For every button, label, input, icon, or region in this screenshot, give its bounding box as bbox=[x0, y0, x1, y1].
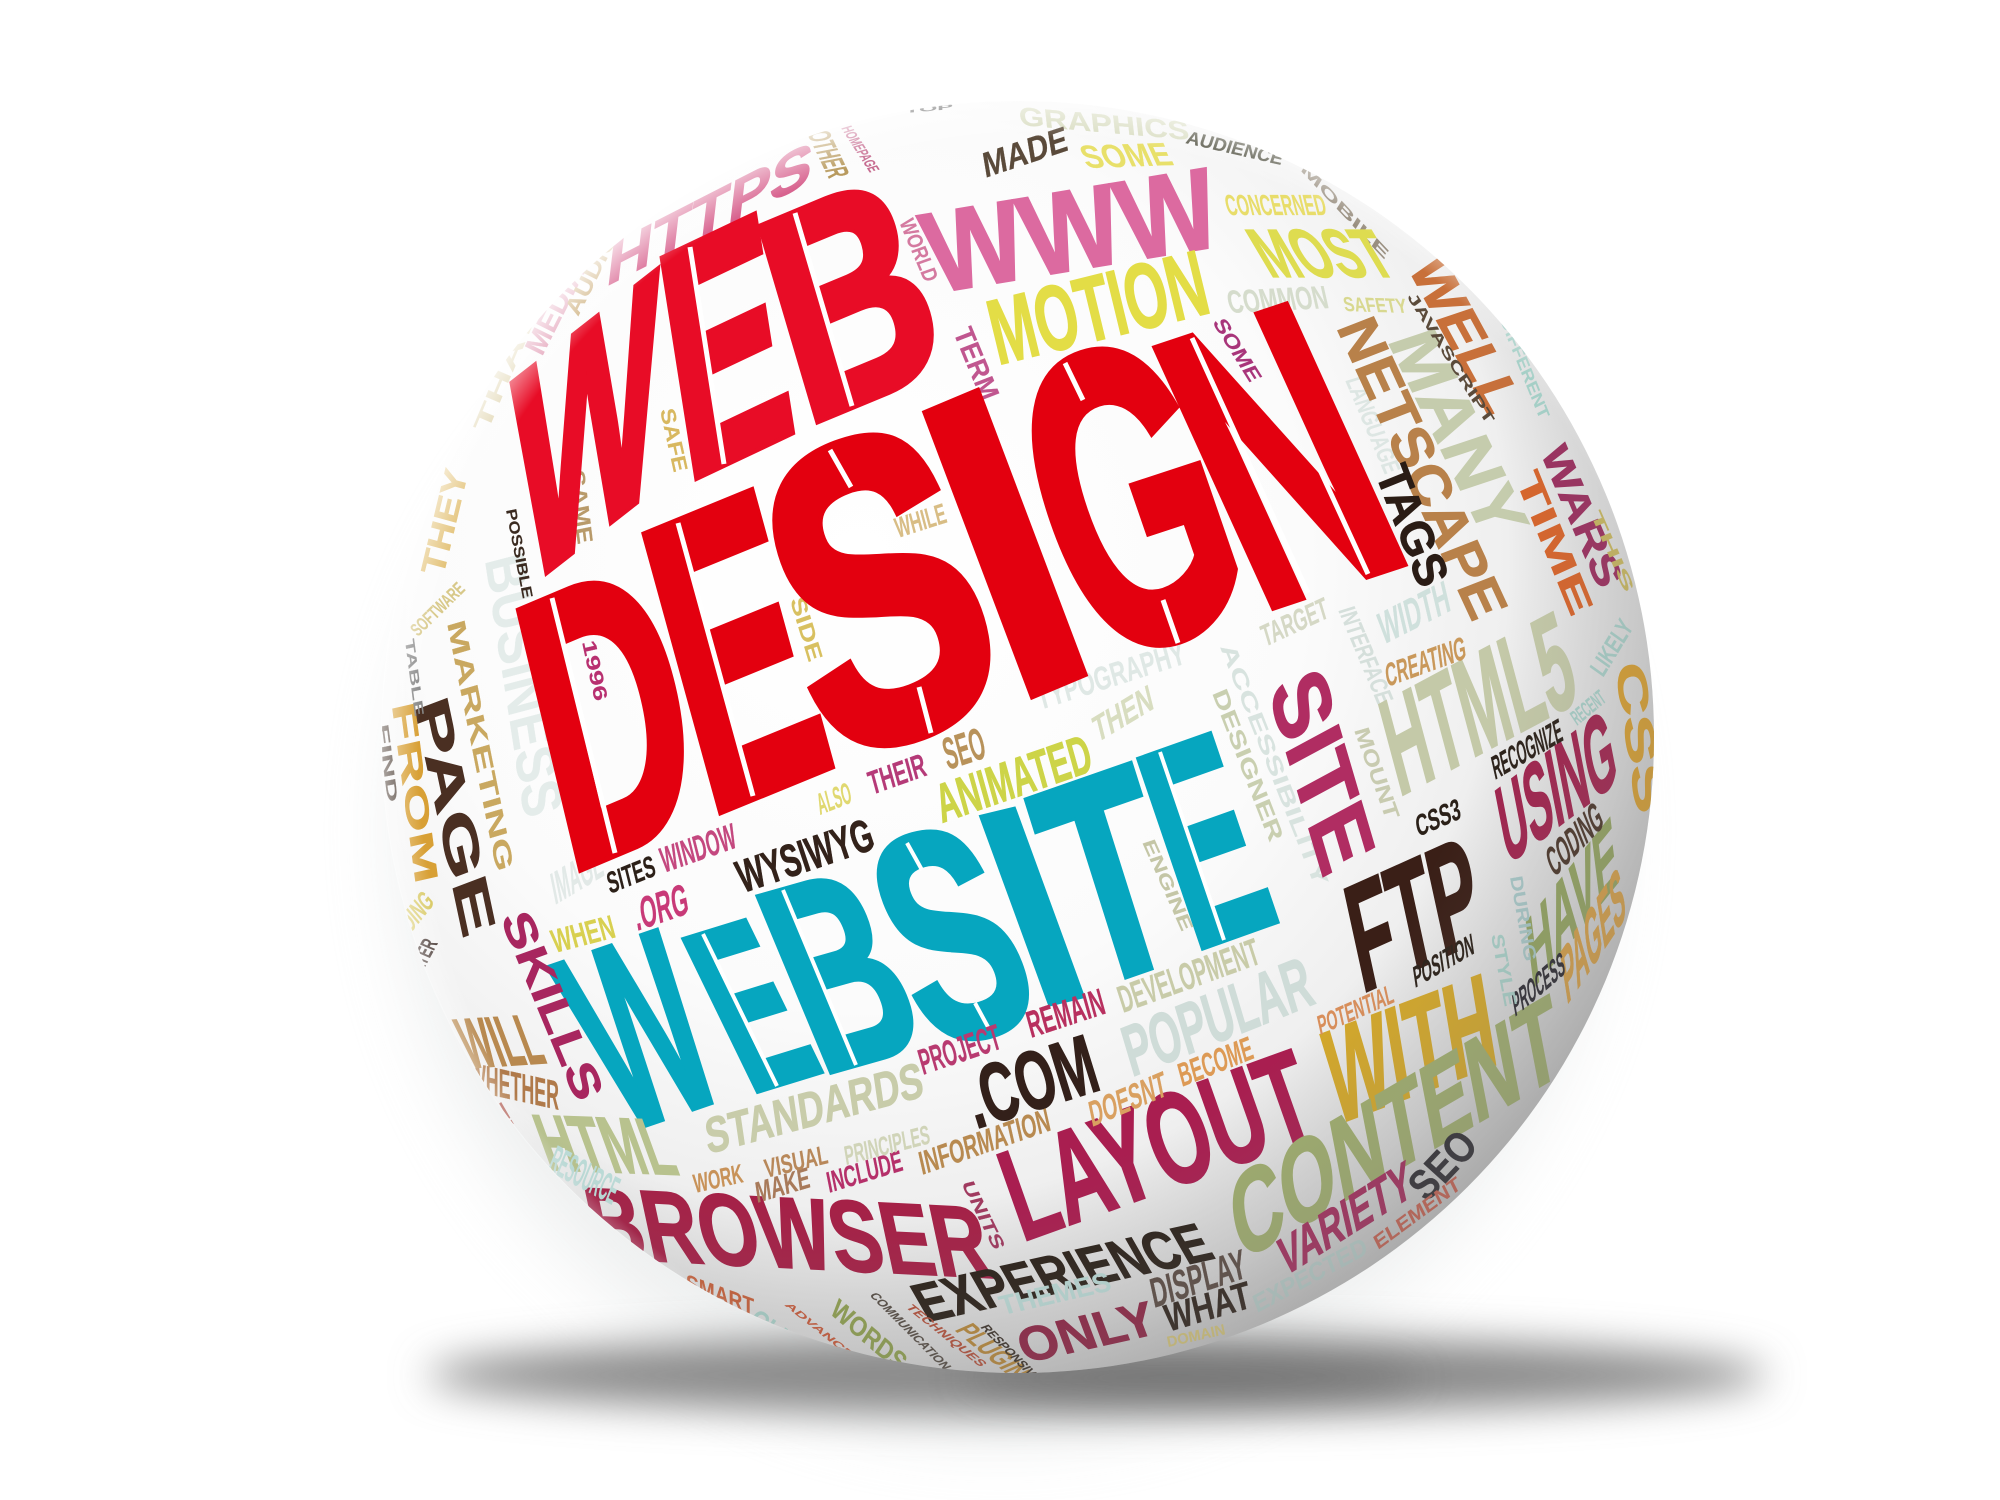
ground shadow bbox=[427, 1335, 1767, 1415]
word: MOST: MOST bbox=[1233, 215, 1409, 292]
upper-left small words: OTHER bbox=[800, 128, 857, 180]
right lower small words: DURING bbox=[1506, 874, 1541, 963]
right lower small words: RECENT bbox=[1566, 685, 1609, 730]
top small words: CONCERNED bbox=[1221, 189, 1330, 221]
left side words: MARKETING bbox=[442, 616, 519, 875]
right lower small words: CSS bbox=[1606, 658, 1674, 817]
pale background words: BUSINESS bbox=[473, 547, 575, 823]
right lower small words: RECOGNIZE bbox=[1488, 711, 1566, 787]
pale background words: MOBILE bbox=[1298, 159, 1392, 262]
middle small words: ANIMATED bbox=[929, 722, 1098, 834]
pale background words: THEN bbox=[1089, 676, 1157, 750]
middle small words: .ORG bbox=[630, 873, 692, 940]
word cloud on sphere bbox=[375, 101, 1674, 1383]
middle small words bbox=[547, 717, 1198, 1082]
middle small words: WYSIWYG bbox=[730, 808, 880, 902]
word: HTML5: HTML5 bbox=[1367, 581, 1588, 825]
pale background words: INTERFACE bbox=[1333, 603, 1399, 707]
word: WEBSITE bbox=[546, 730, 1280, 1128]
right lower small words: CREATING bbox=[1383, 629, 1468, 694]
top small words: MADE bbox=[980, 118, 1070, 185]
lower small words: CLIENT bbox=[745, 1303, 831, 1378]
lower small words: WHAT bbox=[1160, 1273, 1255, 1340]
left side words: DOING bbox=[387, 885, 439, 947]
word: USING: USING bbox=[1489, 685, 1624, 887]
lower small words: ADVANCED bbox=[782, 1301, 867, 1366]
right upper words: JAVASCRIPT bbox=[1405, 289, 1498, 427]
right lower small words: PROCESS bbox=[1510, 944, 1567, 1024]
middle small words: WHEN bbox=[547, 908, 619, 960]
lower small words: WORK bbox=[691, 1158, 745, 1199]
lower small words: WORDS bbox=[826, 1293, 912, 1378]
middle small words: SEO bbox=[937, 717, 990, 779]
word: WEB: E bbox=[640, 142, 810, 549]
upper-left small words: MEDIA bbox=[518, 258, 592, 360]
lower small words: UNITS bbox=[957, 1179, 1010, 1251]
word: WEBSITE: T bbox=[1005, 702, 1212, 1050]
right upper words: MANY bbox=[1373, 320, 1544, 545]
left side words: FROM bbox=[385, 698, 445, 887]
lower small words: ELEMENT bbox=[1370, 1172, 1464, 1254]
pale background words: TARGET bbox=[1257, 591, 1332, 653]
word: ONLY: ONLY bbox=[1009, 1291, 1164, 1373]
sphere shading overlay bbox=[381, 100, 1655, 1374]
right upper words: WELL bbox=[1396, 251, 1537, 421]
word: DESIGN: N bbox=[1105, 220, 1454, 689]
middle small words: SITES bbox=[603, 849, 659, 900]
lower small words: BECOME bbox=[1174, 1029, 1257, 1094]
left side words: WHETHER bbox=[469, 1053, 559, 1119]
word: WITH: WITH bbox=[1315, 944, 1505, 1153]
lower small words: TEXT bbox=[1546, 1024, 1616, 1114]
sphere body bbox=[382, 101, 1654, 1373]
lower small words: THEMES bbox=[995, 1266, 1115, 1321]
middle small words: PROJECT bbox=[914, 1016, 1005, 1082]
top small words bbox=[980, 118, 1409, 317]
pale background words: LANGUAGE bbox=[1340, 373, 1406, 477]
word: FTP: FTP bbox=[1333, 804, 1494, 1024]
right upper words: NETSCAPE bbox=[1325, 309, 1521, 627]
word: DESIGN: I bbox=[872, 296, 1137, 788]
right lower small words: LIKELY bbox=[1585, 614, 1638, 681]
upper-left small words: SAME bbox=[564, 468, 598, 546]
left side words: SKILLS bbox=[491, 905, 614, 1106]
upper-left small words: HTTPS bbox=[603, 127, 817, 300]
left side words: LATER bbox=[400, 935, 442, 982]
upper-left small words: THEY bbox=[414, 465, 475, 579]
word: STANDARDS: STANDARDS bbox=[701, 1051, 927, 1165]
top small words: SOME bbox=[1074, 136, 1178, 175]
middle small words: WINDOW bbox=[656, 815, 740, 880]
pale background words: DESIGNER bbox=[1208, 685, 1288, 845]
right upper words: WARS bbox=[1532, 439, 1632, 593]
right upper words: TAGS bbox=[1366, 457, 1460, 594]
middle small words: REMAIN bbox=[1022, 980, 1109, 1046]
lower small words: DOMAIN bbox=[1165, 1321, 1227, 1350]
pale background words: IMAGE bbox=[547, 835, 607, 914]
upper-left small words: SOME bbox=[1208, 315, 1267, 385]
upper-left small words: AUDIO bbox=[560, 228, 622, 319]
word: WEB: W bbox=[510, 203, 667, 658]
upper-left small words: HOMEPAGE bbox=[838, 124, 883, 174]
word: DESIGN bbox=[516, 300, 1408, 874]
word: DESIGN: S bbox=[715, 325, 1042, 853]
word: WEBSITE: S bbox=[830, 760, 1072, 1109]
lower small words: MAKE bbox=[753, 1161, 812, 1209]
upper-left small words: WORLD bbox=[895, 215, 943, 285]
word: EXPERIENCE: EXPERIENCE bbox=[901, 1212, 1223, 1333]
upper-left small words bbox=[414, 124, 1267, 703]
word: SITE: SITE bbox=[1252, 653, 1393, 889]
word: WEBSITE: W bbox=[523, 877, 756, 1184]
word: DESIGN: G bbox=[967, 244, 1292, 748]
word: WEB: B bbox=[729, 109, 971, 486]
lower small words: SEO bbox=[1398, 1121, 1487, 1209]
right upper words: TIME bbox=[1508, 465, 1601, 621]
left side words: WILL bbox=[446, 1000, 554, 1083]
lower small words: DISPLAY bbox=[1146, 1240, 1250, 1317]
upper-left small words: POSSIBLE bbox=[503, 507, 536, 600]
word: HAVE: HAVE bbox=[1521, 794, 1622, 1010]
left side words: TABLE bbox=[402, 637, 427, 718]
right lower small words: STYLE bbox=[1487, 932, 1521, 1008]
lower small words: SMART bbox=[686, 1269, 754, 1320]
word: DEVELOPMENT: DEVELOPMENT bbox=[1112, 930, 1264, 1021]
lower small words: TECHNIQUES bbox=[903, 1303, 991, 1368]
lower small words: EXPECTED bbox=[1249, 1232, 1371, 1318]
lower small words: THIS bbox=[485, 1099, 540, 1172]
upper-left small words: SIDE bbox=[786, 593, 827, 665]
word: POPULAR: POPULAR bbox=[1114, 941, 1321, 1092]
left side words: PAGE bbox=[404, 689, 506, 944]
right lower small words: POSITION bbox=[1411, 927, 1476, 994]
lower small words: INCLUDE bbox=[824, 1144, 905, 1199]
right upper words: THIS bbox=[1587, 508, 1638, 594]
lower small words: VARIETY bbox=[1273, 1149, 1416, 1288]
upper-left small words: TERM bbox=[947, 323, 1006, 404]
lower small words: RESPONSIVE bbox=[978, 1323, 1046, 1383]
lower small words: PLUGIN bbox=[948, 1319, 1038, 1382]
pale background words: TYPOGRAPHY bbox=[1032, 634, 1189, 717]
word: LAYOUT: LAYOUT bbox=[982, 1022, 1331, 1268]
word: CONTENT: CONTENT bbox=[1220, 969, 1570, 1286]
left side words: FIND bbox=[375, 722, 401, 804]
middle small words: ALSO bbox=[813, 776, 855, 821]
right lower small words: POTENTIAL bbox=[1315, 978, 1396, 1041]
pale background words: ACCESSIBILITY bbox=[1216, 640, 1333, 889]
pale background words: WIDTH bbox=[1374, 570, 1454, 654]
word: WEBSITE: E bbox=[651, 869, 850, 1141]
word: WEBSITE: I bbox=[945, 746, 1118, 1065]
upper-left small words: WHILE bbox=[891, 497, 950, 544]
word: DESIGN: D bbox=[486, 475, 731, 952]
lower small words: RESOURCE bbox=[544, 1137, 625, 1213]
word: WEB bbox=[509, 190, 934, 577]
right lower small words: PAGES bbox=[1556, 849, 1629, 1020]
pale background words: MOUNT bbox=[1350, 725, 1404, 821]
upper-left small words: THAT bbox=[469, 309, 540, 435]
pale background words: GRAPHICS bbox=[1017, 101, 1191, 146]
word: MOTION: MOTION bbox=[978, 230, 1218, 384]
lower small words: DOESNT bbox=[1085, 1063, 1170, 1134]
pale background words: SEARCH bbox=[1248, 117, 1377, 198]
soft halo behind sphere bbox=[400, 230, 1600, 1430]
word: WEBSITE: E bbox=[1109, 671, 1303, 1009]
middle small words: ENGINE bbox=[1138, 837, 1198, 933]
word: .COM: .COM bbox=[954, 1016, 1108, 1146]
right upper words bbox=[1325, 251, 1638, 627]
upper-left small words: 1996 bbox=[578, 638, 612, 703]
left side words: SOFTWARE bbox=[406, 578, 469, 640]
lower small words: VISUAL bbox=[762, 1139, 830, 1184]
right lower small words bbox=[1315, 614, 1674, 1041]
upper-left small words: SAFE bbox=[656, 406, 692, 474]
pale background words: TOP bbox=[905, 102, 953, 115]
right lower small words: CSS3 bbox=[1413, 792, 1463, 843]
right lower small words: CODING bbox=[1541, 792, 1608, 886]
lower small words: INFORMATION bbox=[915, 1101, 1054, 1182]
middle small words: THEIR bbox=[864, 746, 930, 802]
lower small words: PRINCIPLES bbox=[842, 1119, 932, 1171]
lower small words: COMMUNICATION bbox=[867, 1291, 955, 1371]
pale background words bbox=[473, 101, 1553, 914]
word: WWW: WWW bbox=[910, 143, 1232, 317]
word: HTML: HTML bbox=[523, 1097, 687, 1192]
pale background words: DIFFERENT bbox=[1497, 313, 1553, 422]
top small words: AUDIENCE bbox=[1184, 127, 1286, 169]
lower small words bbox=[485, 1024, 1616, 1383]
left side words bbox=[375, 578, 614, 1119]
top small words: SAFETY bbox=[1341, 293, 1409, 317]
word: DESIGN: E bbox=[608, 401, 862, 900]
word: WEBSITE: B bbox=[724, 812, 956, 1129]
pale background words: COMMON bbox=[1223, 279, 1332, 320]
word: BROWSER: BROWSER bbox=[575, 1166, 1000, 1300]
